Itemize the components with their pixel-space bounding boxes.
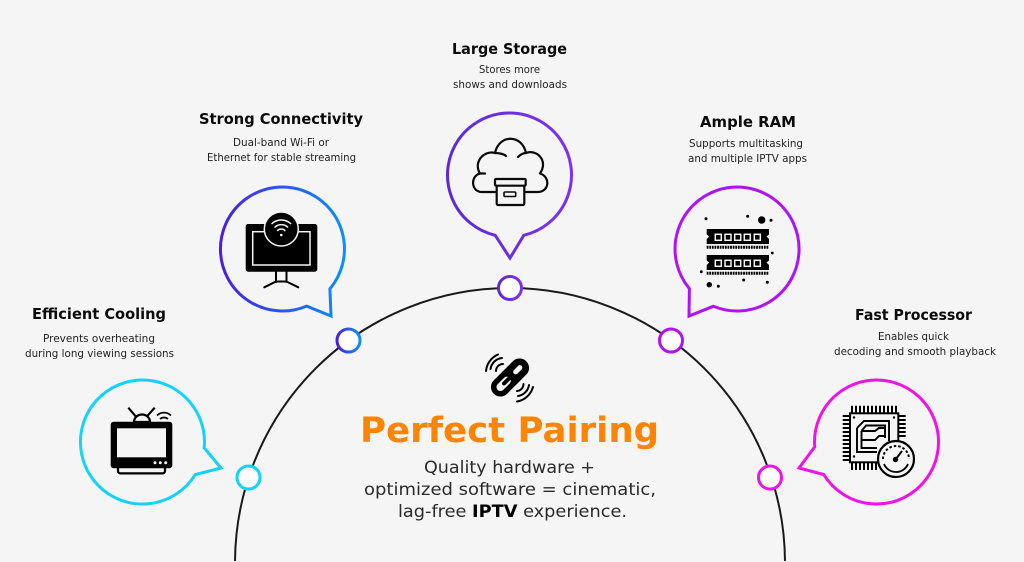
icon: wifi monitor [246, 212, 317, 287]
speech bubble: magenta [799, 380, 939, 504]
heading: ample ram: Ample RAM [700, 113, 796, 131]
central arc [235, 288, 785, 561]
panel: strong connectivity [199, 110, 363, 352]
text: efficient cooling description: Prevents overheating [43, 333, 155, 345]
text: efficient cooling description: during long viewing sessions [25, 348, 174, 360]
text: ample ram description [688, 138, 807, 165]
connector node: violet [660, 329, 682, 352]
icon: ram modules [700, 215, 774, 288]
panel: ample ram [660, 113, 807, 352]
heading: large storage: Large Storage [452, 40, 567, 58]
text: strong connectivity description: Dual-band Wi-Fi or [233, 137, 330, 149]
text: large storage description: Stores more [479, 64, 540, 76]
text: summary [364, 458, 656, 522]
text: efficient cooling description [25, 333, 174, 360]
text: large storage description: shows and downloads [453, 79, 567, 91]
icon: vibrating link [486, 354, 533, 402]
title: Perfect Pairing [360, 411, 659, 451]
heading: strong connectivity: Strong Connectivity [199, 110, 363, 128]
panel: fast processor [758, 306, 997, 504]
speech bubble: cyan [80, 380, 221, 504]
text: strong connectivity description [207, 137, 356, 164]
heading: fast processor: Fast Processor [855, 306, 972, 324]
icon: processor with gauge [843, 406, 914, 477]
text: summary: lag-free IPTV experience. [398, 502, 627, 522]
connector node: purple [498, 276, 522, 300]
text: ample ram description: Supports multitasking [689, 138, 803, 150]
speech bubble: blue [220, 187, 344, 316]
speech bubble: violet [675, 187, 799, 316]
connector node: magenta [758, 466, 782, 489]
panel: large storage [447, 40, 571, 300]
panel: efficient cooling [25, 305, 260, 504]
icon: television [111, 408, 172, 473]
text: summary: optimized software = cinematic, [364, 480, 656, 500]
connector node: blue [337, 329, 360, 352]
connector node: cyan [237, 466, 260, 489]
text: large storage description [453, 64, 567, 91]
icon: cloud storage [473, 139, 547, 205]
text: fast processor description [834, 331, 997, 358]
text: fast processor description: decoding and smooth playback [834, 346, 997, 358]
text: strong connectivity description: Ethernet for stable streaming [207, 152, 356, 164]
heading: efficient cooling: Efficient Cooling [32, 305, 166, 323]
text: fast processor description: Enables quick [878, 331, 950, 343]
speech bubble: purple [447, 113, 571, 258]
text: summary: Quality hardware + [424, 458, 595, 478]
text: ample ram description: and multiple IPTV apps [688, 153, 807, 165]
